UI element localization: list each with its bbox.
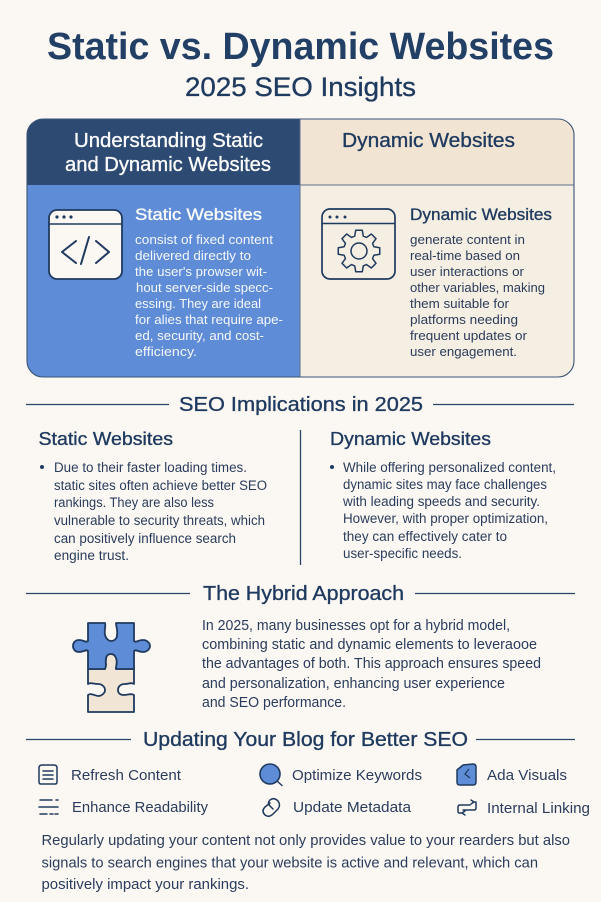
heading: understanding: Understanding Static: [74, 130, 263, 152]
text: static websites: [135, 205, 283, 359]
title: [47, 26, 554, 102]
item: refresh content: Refresh Content: [71, 768, 181, 784]
column: dynamic SEO: However, with proper optimization,: [343, 511, 548, 526]
column: static SEO: Static Websites: [38, 429, 173, 449]
text: hybrid paragraph: In 2025, many businesses opt for a hybrid model,: [202, 618, 510, 634]
title: Static vs. Dynamic Websites: [47, 26, 554, 68]
text: dynamic websites: real-time based on: [410, 248, 520, 263]
text: dynamic websites: [410, 205, 552, 359]
item: internal linking: Internal Linking: [487, 801, 590, 817]
text: hybrid paragraph: the advantages of both. This approach ensures speed: [202, 656, 541, 672]
text: static websites: efficiency.: [135, 344, 197, 359]
text: static websites: hout server-side specc-: [136, 280, 273, 295]
column: static SEO: static sites often achieve better SEO: [54, 478, 267, 493]
text: static websites: delivered directly to: [135, 248, 251, 263]
item: update metadata: Update Metadata: [293, 800, 412, 816]
text: dynamic websites: user interactions or: [410, 264, 525, 279]
text: hybrid paragraph: and SEO performance.: [202, 695, 346, 711]
text: static websites: Static Websites: [135, 205, 262, 224]
heading: dynamic websites: Dynamic Websites: [342, 130, 515, 152]
column: dynamic SEO: they can effectively cater to: [343, 529, 507, 544]
item: enhance readability: Enhance Readability: [72, 800, 209, 816]
text: dynamic websites: frequent updates or: [410, 328, 528, 343]
text: hybrid paragraph: combining static and dynamic elements to leveraooe: [202, 637, 537, 653]
item: add visuals: [457, 764, 567, 785]
text: hybrid paragraph: [202, 618, 541, 711]
text: static websites: essing. They are ideal: [135, 296, 261, 311]
heading: understanding: and Dynamic Websites: [65, 154, 271, 176]
item: update metadata: [263, 799, 412, 816]
text: closing paragraph: positively impact your rankings.: [42, 876, 249, 893]
column: static SEO: engine trust.: [54, 548, 129, 563]
text: closing paragraph: Regularly updating your content not only provides value to your rearders but also: [42, 832, 570, 849]
item: optimize keywords: [260, 764, 422, 786]
text: closing paragraph: [42, 832, 570, 893]
heading: SEO implications: SEO Implications in 2025: [179, 394, 423, 416]
column: dynamic SEO: [330, 429, 556, 561]
column: dynamic SEO: dynamic sites may face challenges: [343, 477, 547, 492]
column: dynamic SEO: user-specific needs.: [343, 546, 462, 561]
text: static websites: consist of fixed content: [135, 232, 273, 247]
text: dynamic websites: Dynamic Websites: [410, 205, 552, 224]
text: dynamic websites: user engagement.: [410, 344, 517, 359]
text: hybrid paragraph: and personalization, enhancing user experience: [202, 676, 505, 692]
column: static SEO: [38, 429, 267, 563]
text: closing paragraph: signals to search engines that your website is active and relevant, which can: [42, 854, 538, 872]
text: dynamic websites: them suitable for: [410, 296, 510, 311]
text: dynamic websites: generate content in: [410, 232, 525, 247]
heading: hybrid approach: The Hybrid Approach: [203, 583, 404, 605]
column: static SEO: rankings. They are also less: [54, 495, 214, 510]
text: static websites: the user's prowser wit-: [135, 264, 267, 279]
heading: updating your blog: Updating Your Blog for Better SEO: [143, 729, 468, 751]
title: 2025 SEO Insights: [185, 72, 416, 102]
text: dynamic websites: platforms needing: [410, 312, 518, 327]
item: add visuals: Ada Visuals: [487, 768, 567, 784]
column: static SEO: vulnerable to security threats, which: [54, 513, 265, 528]
column: dynamic SEO: with leading speeds and security.: [342, 494, 540, 509]
item: optimize keywords: Optimize Keywords: [292, 768, 422, 784]
column: dynamic SEO: While offering personalized content,: [343, 460, 556, 475]
text: static websites: ed, security, and cost-: [135, 328, 264, 343]
column: static SEO: Due to their faster loading times.: [54, 460, 247, 475]
column: static SEO: can positively influence search: [54, 531, 236, 546]
text: static websites: for alies that require ape-: [135, 312, 283, 327]
text: dynamic websites: other variables, making: [410, 280, 545, 295]
icon: code window: [49, 210, 122, 279]
item: refresh content: [39, 765, 181, 784]
column: dynamic SEO: Dynamic Websites: [330, 429, 491, 449]
panel: comparison: [27, 119, 574, 377]
icon: puzzle: [73, 623, 150, 712]
icon: gear window: [322, 209, 395, 279]
heading: understanding: [65, 130, 271, 176]
